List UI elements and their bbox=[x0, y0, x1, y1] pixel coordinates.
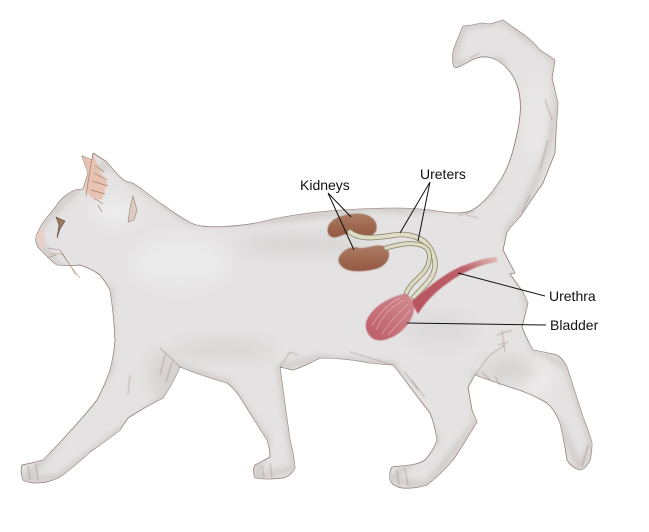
muzzle and whiskers bbox=[36, 226, 80, 278]
leader lines bbox=[328, 182, 546, 325]
label: Urethra: Urethra bbox=[549, 288, 596, 304]
label: Ureters: Ureters bbox=[420, 166, 466, 182]
icon: eye bbox=[56, 217, 65, 238]
ureters bbox=[350, 232, 435, 297]
upper kidney bbox=[328, 214, 376, 237]
urethra bbox=[411, 257, 497, 314]
cat fur details bbox=[28, 53, 588, 486]
diagram: cat urinary system bbox=[20, 20, 598, 489]
icon: ear bbox=[82, 153, 137, 222]
bladder bbox=[366, 294, 414, 340]
label: Bladder: Bladder bbox=[550, 317, 599, 333]
kidneys bbox=[328, 214, 389, 271]
cat body bbox=[21, 20, 592, 488]
lower kidney bbox=[339, 246, 389, 271]
bladder and urethra bbox=[366, 257, 497, 340]
label: Kidneys: Kidneys bbox=[300, 177, 350, 193]
